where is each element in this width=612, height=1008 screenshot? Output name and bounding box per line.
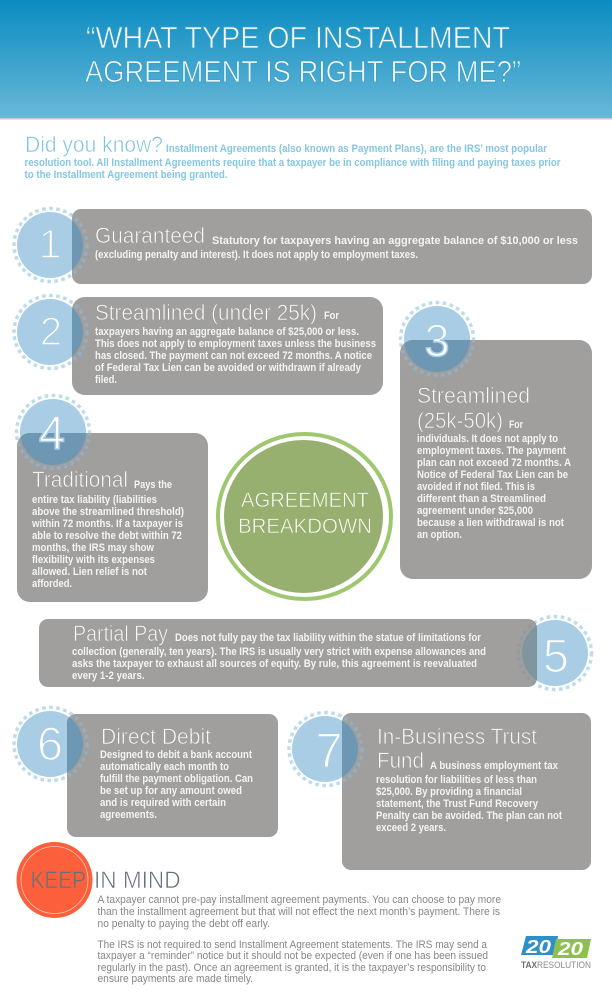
text: keep in mind notes: taxpayer a “reminder” notice but it should not be expected (even if one has been issued [98,950,488,962]
number 3: 3 [424,315,450,366]
text: traditional description: allowed. Lien relief is not [32,566,147,578]
text: traditional description: Pays the [134,479,172,491]
did you know intro: Did you know? [25,132,163,157]
text: direct debit description [100,749,253,821]
text: partial pay description: asks the taxpayer to exhaust all sources of equity. By rule, this agreement is reevaluated [72,658,477,670]
heading: streamlined 25k-50k: Streamlined [417,383,530,408]
text: direct debit description: and is required with certain [100,797,226,809]
text: partial pay description: collection (generally, ten years). The IRS is usually very strict with expense allowances and [72,646,486,658]
text: traditional description: flexibility with its expenses [32,554,155,566]
text: streamlined 25k-50k description: avoided if not filed. This is [417,481,535,493]
text: streamlined under 25k description: taxpayers having an aggregate balance of $25,000 or less. [95,326,359,338]
heading: traditional: Traditional [32,467,128,492]
text: keep in mind notes [98,894,501,985]
text: partial pay description [72,632,486,682]
text: guaranteed description [95,235,578,261]
text: streamlined under 25k description: filed. [95,374,117,386]
logo: 2020 tax resolution: 20 [525,937,551,957]
text: streamlined 25k-50k description: individuals. It does not apply to [417,433,558,445]
text: traditional description: months, the IRS may show [32,542,155,554]
text: guaranteed description: Statutory for taxpayers having an aggregate balance of $10,000 or less [212,235,578,247]
heading: in-business trust fund: In-Business Trust [377,724,537,749]
heading: streamlined 25k-50k: (25k-50k) [417,408,503,433]
heading: keep in mind [30,867,180,894]
text: streamlined 25k-50k description: because a lien withdrawal is not [417,517,564,529]
title: “WHAT TYPE OF INSTALLMENT [86,21,510,55]
text: streamlined under 25k description: has closed. The payment can not exceed 72 months. A notice [95,350,372,362]
text: guaranteed description: (excluding penalty and interest). It does not apply to employment taxes. [95,249,418,261]
text: keep in mind notes: A taxpayer cannot pre-pay installment agreement payments. You can choose to pay more [98,894,501,906]
text: partial pay description: every 1-2 years. [72,670,144,682]
heading: in-business trust fund: Fund [377,748,424,773]
text: traditional description [31,479,184,590]
logo: 2020 tax resolution [521,936,591,971]
text: direct debit description: automatically each month to [100,761,229,773]
text: traditional description: able to resolve the debt within 72 [32,530,182,542]
title: AGREEMENT IS RIGHT FOR ME?” [85,55,521,89]
agreement breakdown badge [218,434,391,599]
text: traditional description: afforded. [32,578,72,590]
text: streamlined 25k-50k description: employment taxes. The payment [417,445,566,457]
panel: 3 streamlined 25k-50k [400,302,592,579]
logo: 2020 tax resolution: TAXRESOLUTION [521,960,591,971]
badge label: BREAKDOWN [238,514,372,538]
did you know intro [24,132,561,181]
keep in mind section [16,842,501,985]
text: traditional description: above the streamlined threshold) [32,506,184,518]
text: in-business trust fund description: statement, the Trust Fund Recovery [376,798,538,810]
text: streamlined under 25k description: This does not apply to employment taxes unless the business [95,338,376,350]
badge label [238,488,372,538]
text: direct debit description: be set up for any amount owed [100,785,242,797]
number 5: 5 [543,629,569,682]
heading: direct debit: Direct Debit [101,724,211,749]
did you know intro: to the Installment Agreement being granted. [24,169,228,181]
text: keep in mind notes: ensure payments are made timely. [98,973,253,985]
number 6: 6 [37,717,63,770]
text: keep in mind notes: no penalty to paying the debt off early. [98,918,270,930]
text: streamlined 25k-50k description [417,419,571,541]
heading: in-business trust fund [377,724,537,773]
panel: 6 direct debit [14,708,278,837]
header banner [0,0,612,120]
heading: keep in mind: KEEP [30,867,86,894]
panel: 4 traditional [16,396,208,602]
title [85,21,521,89]
number 7: 7 [315,724,343,778]
text: streamlined 25k-50k description: plan can not exceed 72 months. A [417,457,571,469]
number 2: 2 [40,310,62,354]
heading: guaranteed: Guaranteed [95,223,205,248]
text: streamlined 25k-50k description: agreement under $25,000 [417,505,533,517]
text: direct debit description: fulfill the payment obligation. Can [100,773,253,785]
text: keep in mind notes: The IRS is not required to send Installment Agreement statements. The IRS may send a [98,939,487,951]
panel: 5 partial pay [39,616,592,690]
text: streamlined 25k-50k description: different than a Streamlined [417,493,546,505]
icon: orange circle [16,842,92,918]
heading: partial pay: Partial Pay [73,621,168,646]
text: in-business trust fund description: resolution for liabilities of less than [376,774,537,786]
text: in-business trust fund description: exceed 2 years. [376,822,446,834]
text: streamlined 25k-50k description: an option. [417,529,462,541]
did you know intro: Installment Agreements (also known as Payment Plans), are the IRS’ most popular [166,143,548,155]
heading: keep in mind: IN MIND [94,867,180,894]
text: in-business trust fund description [376,760,562,834]
text: streamlined under 25k description: For [324,310,340,322]
text: direct debit description: Designed to debit a bank account [100,749,252,761]
badge label: AGREEMENT [241,488,369,512]
heading: streamlined 25k-50k [417,383,530,433]
number 4: 4 [39,406,65,459]
text: in-business trust fund description: $25,000. By providing a financial [376,786,522,798]
text: streamlined 25k-50k description: For [509,419,524,431]
text: partial pay description: Does not fully pay the tax liability within the statue of limitations for [175,632,482,644]
text: streamlined under 25k description [95,310,376,386]
text: traditional description: entire tax liability (liabilities [32,494,157,506]
text: keep in mind notes: than the installment agreement but that will not effect the next month’s payment. There is [98,906,500,918]
text: in-business trust fund description: Penalty can be avoided. The plan can not [376,810,562,822]
text: keep in mind notes: regularly in the past). Once an agreement is granted, it is the taxpayer’s responsibility to [98,962,486,974]
panel: 1 guaranteed [14,208,592,284]
logo: 2020 tax resolution: 20 [557,939,583,959]
text: traditional description: within 72 months. If a taxpayer is [31,518,183,530]
panel: 7 in-business trust fund [289,712,591,870]
text: streamlined 25k-50k description: Notice of Federal Tax Lien can be [417,469,568,481]
text: direct debit description: agreements. [100,809,157,821]
text: in-business trust fund description: A business employment tax [430,760,558,772]
number 1: 1 [39,221,61,267]
did you know intro: resolution tool. All Installment Agreements require that a taxpayer be in compliance with filing and paying taxes prior [24,157,561,169]
text: streamlined under 25k description: of Federal Tax Lien can be avoided or withdrawn if already [95,362,361,374]
heading: streamlined under 25k: Streamlined (under 25k) [95,300,317,325]
panel: 2 streamlined under 25k [14,296,383,395]
